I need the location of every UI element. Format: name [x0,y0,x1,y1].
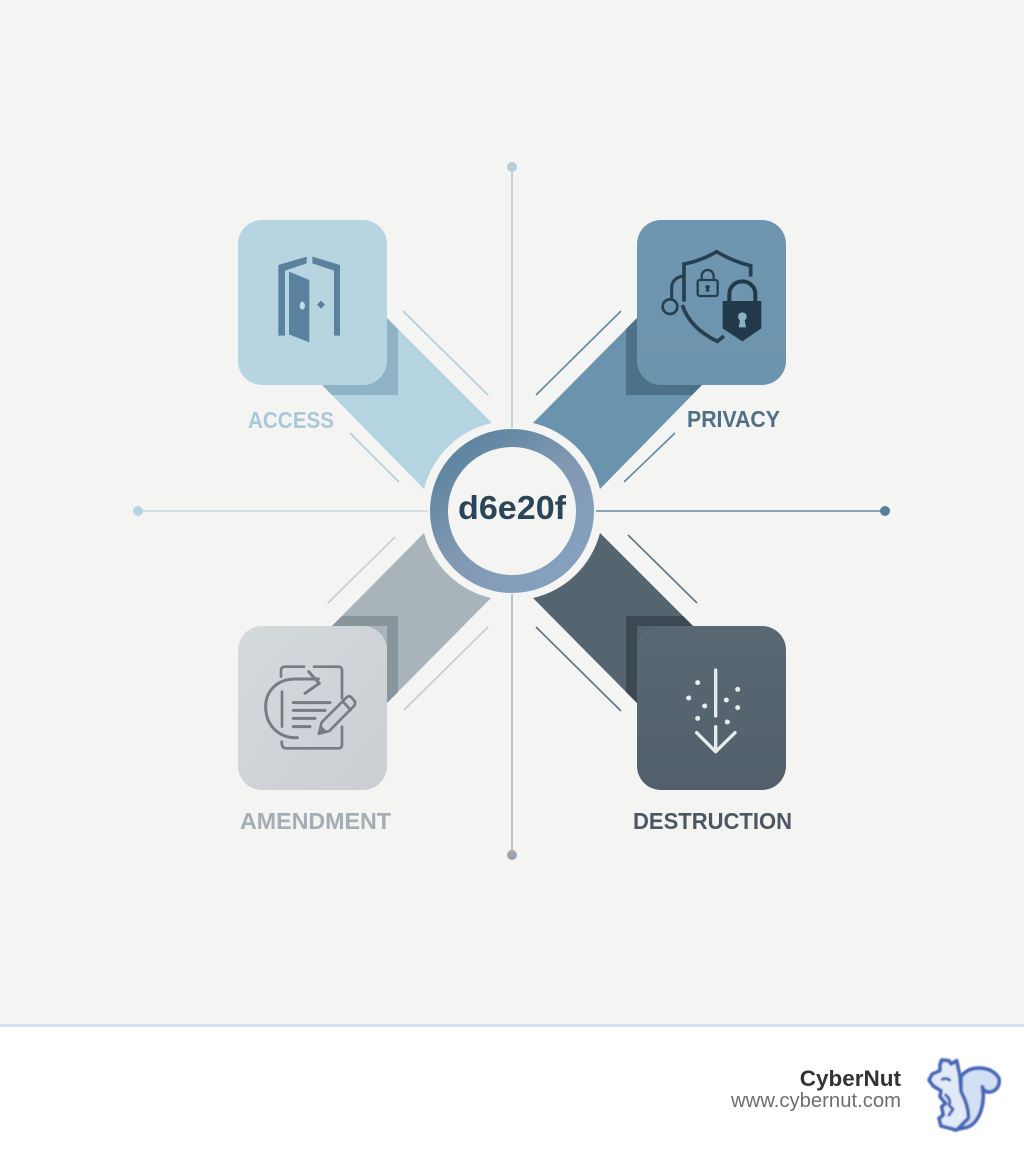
amendment accent lines [328,537,488,710]
privacy card [637,220,786,385]
destruction accent lines [536,535,697,711]
amendment card [238,626,387,790]
access card [238,220,387,385]
icon: open door [278,257,340,342]
amendment band shadow [332,616,398,703]
brand name: CyberNut [800,1066,902,1091]
access accent lines [350,311,488,482]
amendment label: AMENDMENT [240,808,391,834]
amendment band [332,533,491,703]
central hub [439,438,585,584]
destruction band [533,533,693,703]
destruction band shadow [626,616,693,703]
hub ring [439,438,585,584]
icon: downward arrow with particles [686,670,740,752]
access band [322,318,492,489]
panel: privacy [533,220,786,489]
privacy band [533,318,702,489]
website: www.cybernut.com [730,1090,901,1112]
icon: squirrel logo [929,1060,999,1130]
panel: access [238,220,492,489]
destruction label: DESTRUCTION [633,808,792,834]
axis lines with end dots [133,162,890,860]
icon: document with arrow and pencil [266,667,355,748]
panel: destruction [533,533,792,834]
access band shadow [322,318,398,395]
privacy band shadow [626,318,702,395]
privacy accent lines [536,311,675,482]
footer [0,1024,1024,1154]
destruction card [637,626,786,790]
panel: amendment [238,533,491,834]
icon: shield and locks [663,252,761,341]
hub text: d6e20f [458,489,567,526]
privacy label: PRIVACY [687,406,780,432]
access label: ACCESS [248,407,334,433]
